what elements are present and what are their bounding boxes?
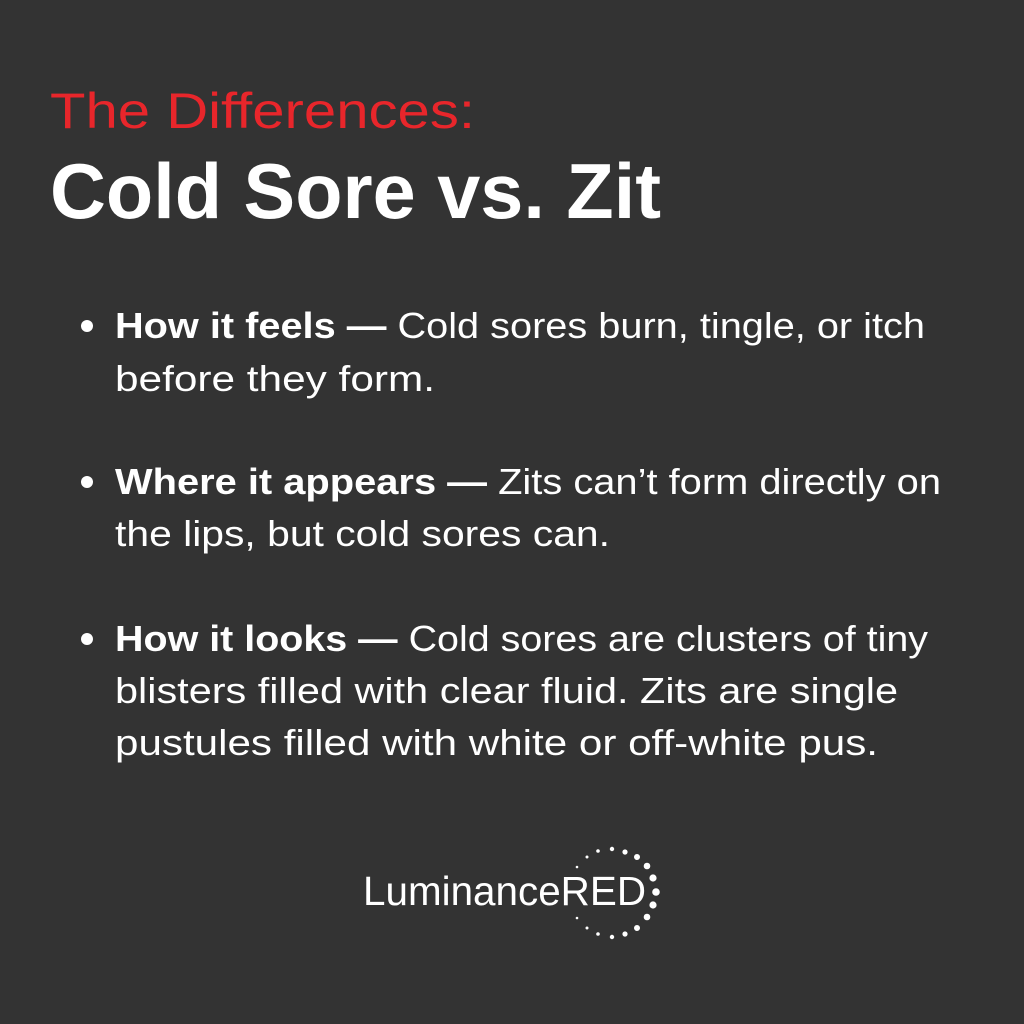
bullet 1: how it feels: How it feels — Cold sores burn, tingle, or itch bbox=[115, 305, 925, 346]
bullet 1: how it feels: before they form. bbox=[115, 358, 435, 399]
subtitle: the differences: The Differences: bbox=[50, 83, 475, 139]
bullet 2: where it appears: Where it appears — Zits can’t form directly on bbox=[115, 461, 941, 502]
bullet list bbox=[81, 305, 941, 763]
title bbox=[50, 83, 661, 235]
bullet 3: how it looks: How it looks — Cold sores are clusters of tiny bbox=[115, 618, 928, 659]
bullet 3: how it looks: blisters filled with clear fluid. Zits are single bbox=[115, 670, 898, 711]
bullet 1: how it feels bbox=[81, 305, 925, 399]
bullet 2: where it appears: the lips, but cold sores can. bbox=[115, 513, 610, 554]
icon: dot arc bbox=[576, 847, 660, 939]
logo: LuminanceRED: LuminanceRED bbox=[363, 868, 646, 914]
bullet 3: how it looks bbox=[81, 618, 928, 763]
bullet 3: how it looks: pustules filled with white or off-white pus. bbox=[115, 722, 878, 763]
logo: LuminanceRED bbox=[363, 847, 660, 939]
bullet 2: where it appears bbox=[81, 461, 941, 554]
heading: cold sore vs zit: Cold Sore vs. Zit bbox=[50, 147, 661, 235]
